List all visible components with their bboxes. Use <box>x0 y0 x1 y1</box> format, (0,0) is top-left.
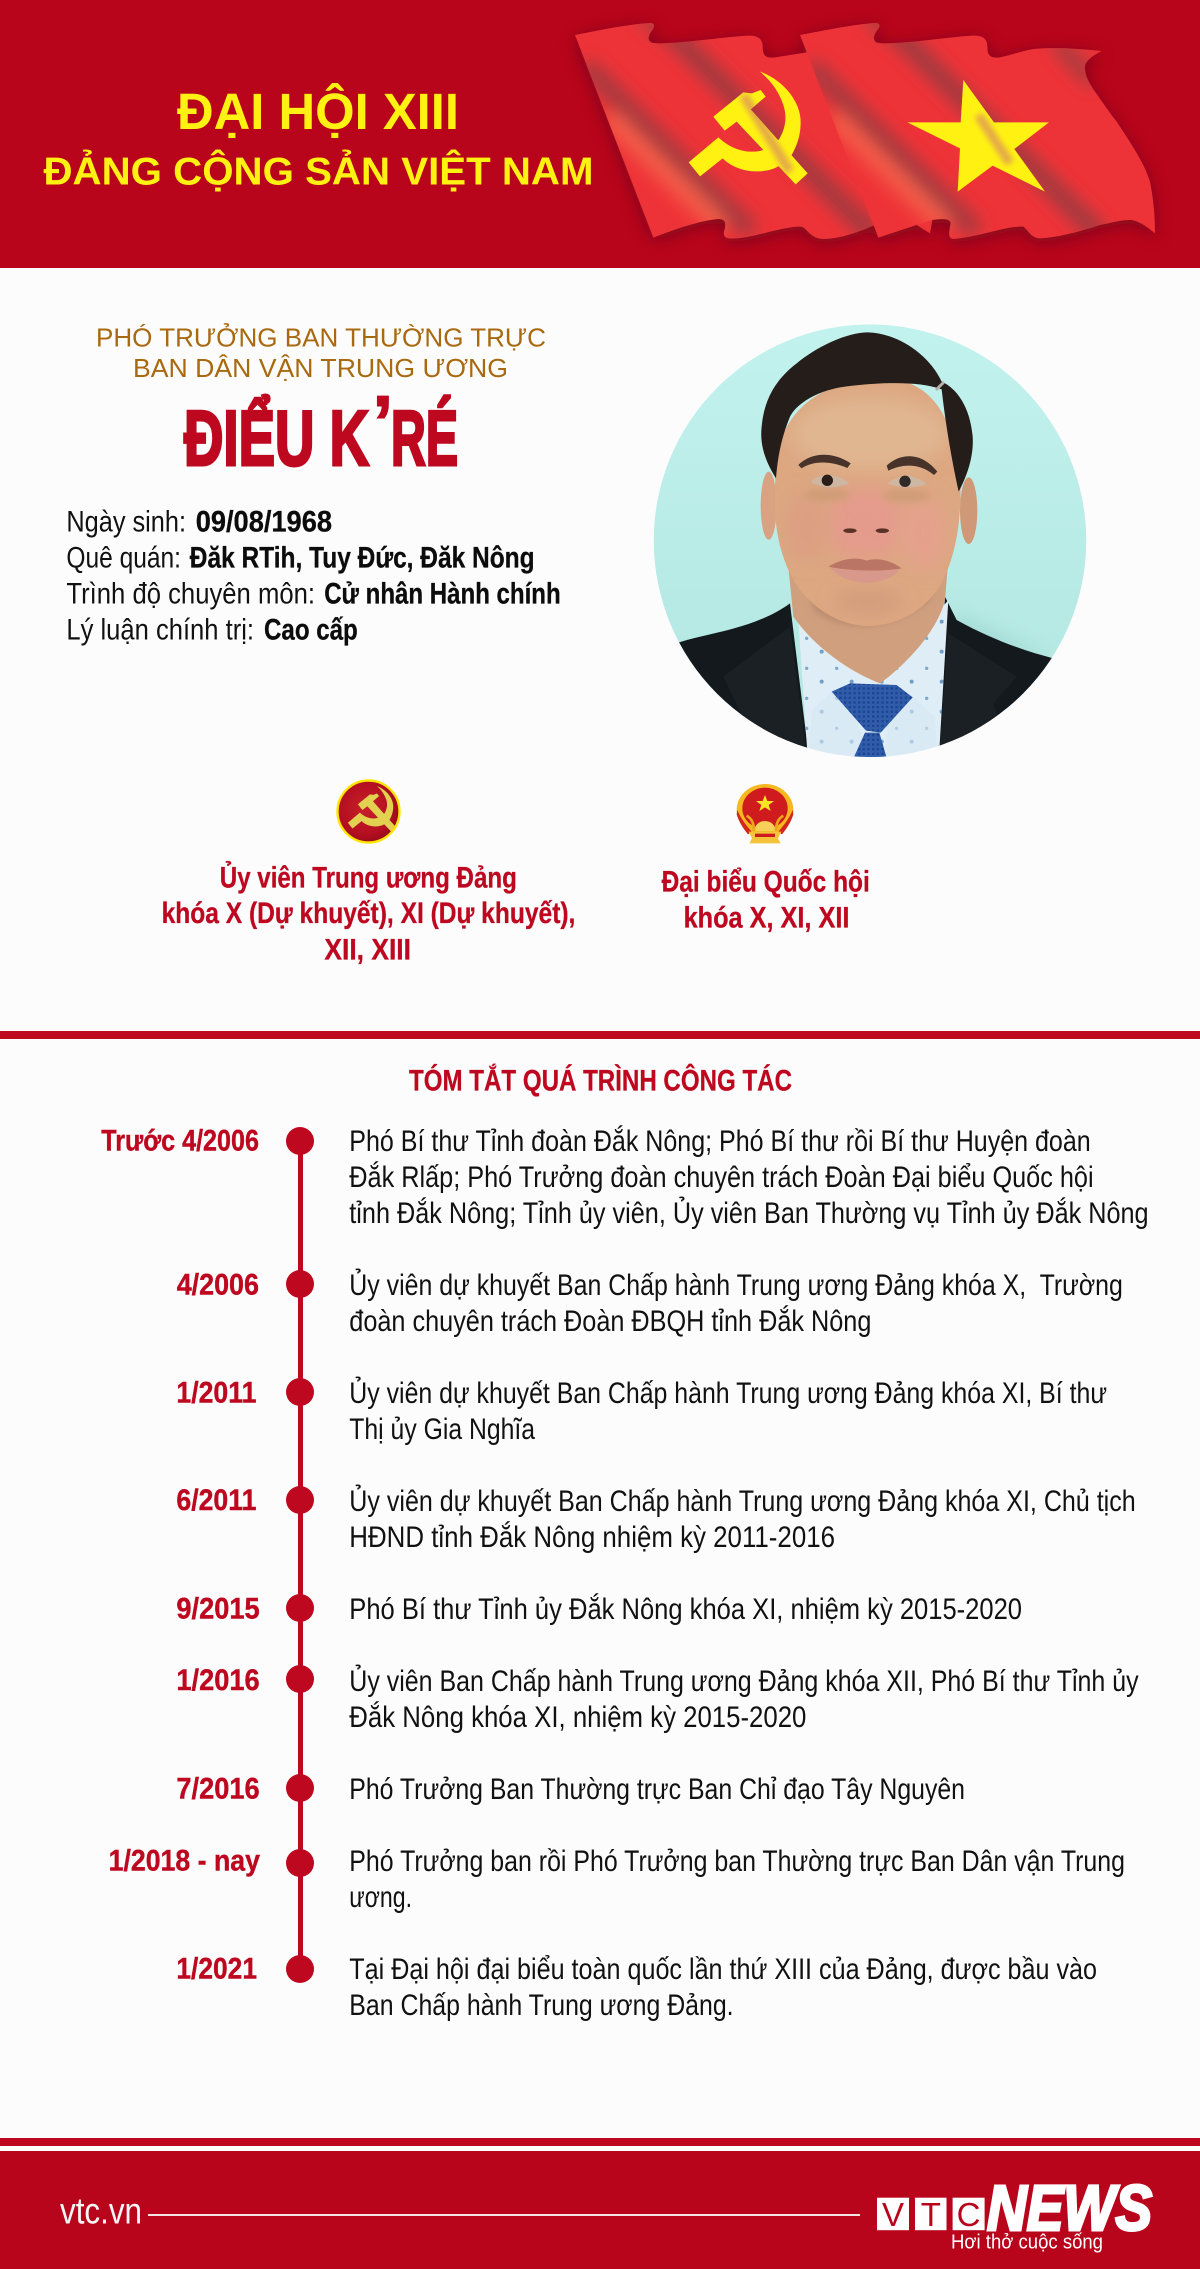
entry: 1/2011: 1/2011 <box>176 1376 256 1409</box>
entry: 1/2021 <box>176 1952 1097 2022</box>
entry: 1/2016 <box>176 1664 1139 1734</box>
position title: PHÓ TRƯỞNG BAN THƯỜNG TRỰC <box>96 322 546 353</box>
logo: VTC News: Hơi thở cuộc sống <box>951 2231 1103 2253</box>
party membership text: Ủy viên Trung ương Đảng <box>220 861 517 895</box>
entry: 1/2021: 1/2021 <box>176 1952 257 1985</box>
section heading: work summary: TÓM TẮT QUÁ TRÌNH CÔNG TÁC <box>409 1064 792 1098</box>
timeline <box>101 1125 1149 2022</box>
website address: vtc.vn <box>60 2190 142 2232</box>
personal details: Cao cấp <box>264 613 358 646</box>
entry: 1/2018 to present: 1/2018 - nay <box>109 1845 260 1878</box>
entry: 4/2006: 4/2006 <box>177 1268 259 1301</box>
neck <box>788 560 948 683</box>
title: ĐẢNG CỘNG SẢN VIỆT NAM <box>44 149 594 194</box>
entry: 1/2011 <box>176 1376 1107 1446</box>
entry: 6/2011 <box>176 1484 1136 1554</box>
logo: VTC News <box>877 2172 1152 2253</box>
personal details: Ngày sinh: <box>66 506 186 539</box>
personal details: Quê quán: <box>66 542 181 575</box>
national assembly text <box>662 866 870 935</box>
entry: 9/2015: Phó Bí thư Tỉnh ủy Đắk Nông khóa XI, nhiệm kỳ 2015-2020 <box>349 1593 1022 1626</box>
position title <box>96 322 546 383</box>
entry: 7/2016: 7/2016 <box>176 1772 260 1805</box>
entry: 1/2011: Thị ủy Gia Nghĩa <box>349 1413 535 1446</box>
logo: VTC News: NEWS <box>987 2172 1152 2244</box>
name heading: RÉ <box>391 394 458 482</box>
nose <box>843 528 857 533</box>
eyebrows <box>798 455 851 468</box>
panel: footer <box>0 2138 1200 2269</box>
panel: header banner <box>0 0 1200 268</box>
personal details: Lý luận chính trị: <box>66 613 254 646</box>
mouth <box>828 559 902 571</box>
icon: waving party and national flags <box>575 18 1155 242</box>
entry: 7/2016: Phó Trưởng Ban Thường trực Ban Chỉ đạo Tây Nguyên <box>349 1773 965 1806</box>
entry: 1/2016: 1/2016 <box>176 1664 260 1697</box>
personal details <box>66 506 561 646</box>
personal details: 09/08/1968 <box>196 506 332 539</box>
entry: 7/2016 <box>176 1772 965 1806</box>
entry: 4/2006 <box>177 1268 1123 1338</box>
personal details: Trình độ chuyên môn: <box>66 577 315 610</box>
eyes <box>811 475 849 487</box>
hair <box>761 332 973 492</box>
personal details: Đăk RTih, Tuy Đức, Đăk Nông <box>190 542 535 575</box>
logo: VTC News: C <box>957 2196 981 2233</box>
icon: national emblem <box>737 784 793 843</box>
entry: 1/2018 to present <box>109 1845 1125 1914</box>
entry: before 4/2006: Trước 4/2006 <box>101 1125 259 1158</box>
entry: 1/2021: Ban Chấp hành Trung ương Đảng. <box>349 1989 734 2022</box>
entry: 6/2011: 6/2011 <box>176 1484 256 1517</box>
entry: 1/2016: Đắk Nông khóa XI, nhiệm kỳ 2015-2020 <box>349 1701 806 1734</box>
party membership text <box>162 861 575 966</box>
shirt <box>798 600 948 767</box>
personal details: Cử nhân Hành chính <box>324 577 561 610</box>
position title: BAN DÂN VẬN TRUNG ƯƠNG <box>133 353 508 383</box>
national assembly text: khóa X, XI, XII <box>684 902 849 935</box>
entry: 9/2015 <box>176 1592 1022 1626</box>
ears <box>761 472 777 540</box>
entry: 1/2018 to present: ương. <box>349 1881 412 1914</box>
logo: VTC News: V <box>882 2196 904 2233</box>
tie <box>832 683 913 733</box>
timeline axis <box>298 1141 303 1969</box>
title: ĐẠI HỘI XIII <box>177 82 459 140</box>
national assembly text: Đại biểu Quốc hội <box>662 866 870 899</box>
suit <box>679 596 1052 748</box>
entry: before 4/2006 <box>101 1125 1149 1230</box>
name heading: ’ <box>372 379 394 467</box>
name heading: ĐIỂU K <box>184 394 369 482</box>
party membership text: XII, XIII <box>324 933 411 966</box>
entry: 6/2011: HĐND tỉnh Đắk Nông nhiệm kỳ 2011-2016 <box>349 1521 835 1554</box>
timeline dots <box>286 1127 314 1983</box>
entry: 4/2006: đoàn chuyên trách Đoàn ĐBQH tỉnh Đắk Nông <box>349 1305 871 1338</box>
entry: 9/2015: 9/2015 <box>176 1592 260 1625</box>
icon: party emblem <box>338 780 400 842</box>
title <box>44 82 594 194</box>
portrait photo <box>654 324 1087 767</box>
party membership text: khóa X (Dự khuyết), XI (Dự khuyết), <box>162 897 575 930</box>
face <box>775 383 961 626</box>
logo: VTC News: T <box>921 2196 941 2233</box>
